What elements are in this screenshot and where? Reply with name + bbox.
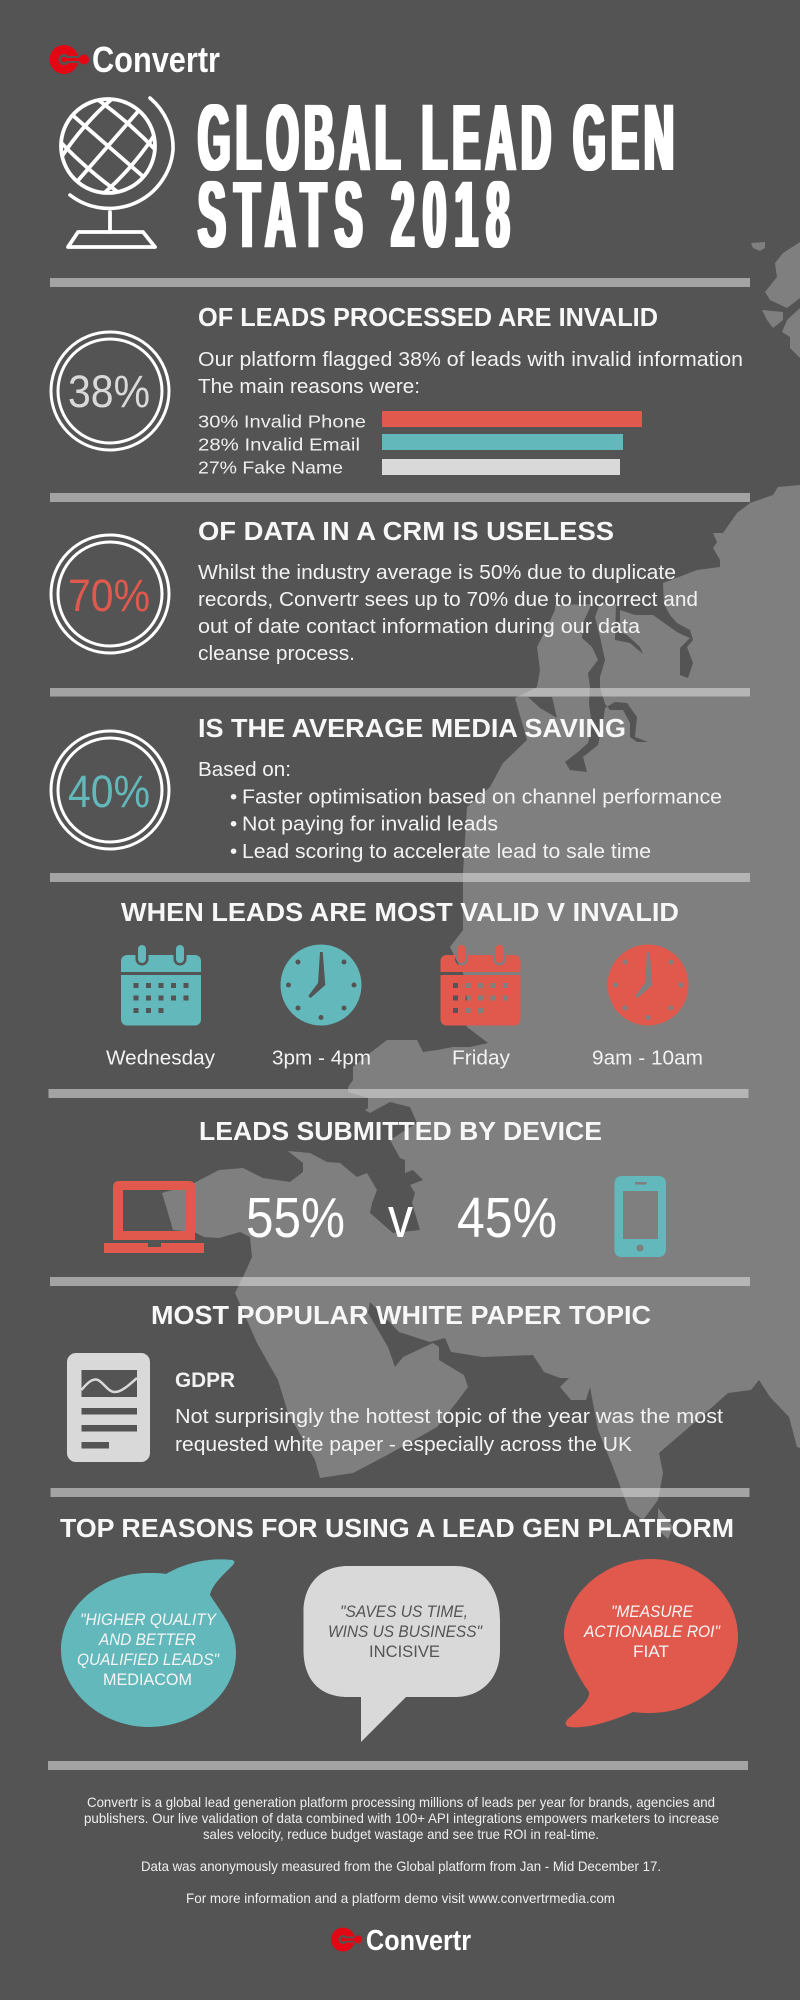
stat ring 38% xyxy=(51,332,169,450)
icon: laptop xyxy=(104,1181,204,1253)
topic name: GDPR xyxy=(175,1369,235,1392)
speech bubble: Mediacom xyxy=(61,1559,236,1727)
panel: top reasons xyxy=(60,1515,738,1742)
heading: WHEN LEADS ARE MOST VALID V INVALID xyxy=(121,899,679,927)
body text xyxy=(198,561,698,665)
topic text: requested white paper - especially across the UK xyxy=(175,1433,632,1456)
speech bubble: Mediacom: MEDIACOM xyxy=(103,1671,192,1689)
icon: teal clock xyxy=(280,944,362,1026)
stat ring 40% xyxy=(51,731,169,849)
stat ring 38%: 38% xyxy=(68,366,150,417)
panel: when leads are valid xyxy=(100,899,703,1070)
speech bubble: Fiat: ACTIONABLE ROI" xyxy=(583,1623,721,1641)
panel: CRM data 70% xyxy=(51,518,698,665)
speech bubble: Fiat: FIAT xyxy=(633,1643,669,1661)
speech bubble: Mediacom: QUALIFIED LEADS" xyxy=(77,1651,220,1669)
map inland seas xyxy=(528,603,693,772)
footer text: Convertr is a global lead generation platform processing millions of leads per year for brands, agencies and xyxy=(87,1794,715,1810)
world map backdrop xyxy=(162,242,800,1539)
footer text: publishers. Our live validation of data combined with 100+ API integrations empowers marketers to increase xyxy=(84,1810,719,1826)
time labels xyxy=(106,1046,703,1070)
time labels: Friday xyxy=(452,1046,511,1070)
icon: document xyxy=(67,1353,150,1462)
footer text: For more information and a platform demo visit www.convertrmedia.com xyxy=(186,1890,615,1906)
device percentages: 45% xyxy=(457,1186,557,1250)
heading: LEADS SUBMITTED BY DEVICE xyxy=(199,1118,602,1146)
speech bubble: Incisive: INCISIVE xyxy=(369,1643,440,1661)
topic text xyxy=(175,1405,723,1456)
bullet list: • xyxy=(230,813,237,836)
heading: IS THE AVERAGE MEDIA SAVING xyxy=(198,715,626,743)
speech bubble: Incisive: WINS US BUSINESS" xyxy=(328,1623,483,1641)
intro text: The main reasons were: xyxy=(198,375,420,398)
time labels: Wednesday xyxy=(106,1046,216,1070)
title: STATS 2018 xyxy=(198,163,510,268)
heading: OF DATA IN A CRM IS USELESS xyxy=(198,518,614,546)
time labels: 9am - 10am xyxy=(592,1046,703,1070)
bar chart: invalid reasons: 28% Invalid Email xyxy=(198,434,360,454)
stat ring 70%: 70% xyxy=(68,570,150,621)
device percentages: 55% xyxy=(246,1186,345,1250)
logo: Convertr top xyxy=(50,39,220,80)
speech bubble: Mediacom: "HIGHER QUALITY xyxy=(80,1611,217,1629)
footer text: Data was anonymously measured from the Global platform from Jan - Mid December 17. xyxy=(141,1858,661,1874)
device percentages: v xyxy=(388,1186,413,1250)
bar chart: invalid reasons: 27% Fake Name xyxy=(198,458,343,478)
body text: Whilst the industry average is 50% due to duplicate xyxy=(198,561,676,584)
bullet list: • xyxy=(230,840,237,863)
stat ring 40%: 40% xyxy=(68,766,150,817)
logo: Convertr bottom xyxy=(331,1925,471,1957)
bullet list: • xyxy=(230,786,237,808)
speech bubble: Incisive xyxy=(304,1566,500,1742)
bullet list xyxy=(198,758,722,863)
body text: out of date contact information during our data xyxy=(198,615,641,638)
bullet list: Based on: xyxy=(198,758,291,781)
intro text: Our platform flagged 38% of leads with invalid information xyxy=(198,348,743,371)
topic text: Not surprisingly the hottest topic of the year was the most xyxy=(175,1405,723,1428)
body text: records, Convertr sees up to 70% due to incorrect and xyxy=(198,588,698,611)
body text: cleanse process. xyxy=(198,642,355,665)
heading: TOP REASONS FOR USING A LEAD GEN PLATFORM xyxy=(60,1515,734,1543)
divider bars xyxy=(48,278,750,1770)
logo: Convertr bottom: Convertr xyxy=(366,1925,471,1957)
title xyxy=(198,86,674,268)
speech bubble: Fiat xyxy=(564,1559,738,1727)
bullet list: Faster optimisation based on channel performance xyxy=(242,786,722,808)
panel: white paper topic xyxy=(67,1302,723,1462)
time labels: 3pm - 4pm xyxy=(272,1046,371,1070)
stat ring 70% xyxy=(51,535,169,653)
speech bubble: Incisive: "SAVES US TIME, xyxy=(340,1603,468,1621)
heading: MOST POPULAR WHITE PAPER TOPIC xyxy=(151,1302,651,1330)
heading: OF LEADS PROCESSED ARE INVALID xyxy=(198,304,658,332)
bar chart: invalid reasons: 30% Invalid Phone xyxy=(198,412,366,432)
icon: phone xyxy=(614,1176,666,1257)
footer text xyxy=(84,1794,719,1906)
panel: invalid leads 38% xyxy=(51,304,743,478)
logo: Convertr top: Convertr xyxy=(92,39,220,80)
device percentages xyxy=(246,1186,557,1250)
bullet list: Lead scoring to accelerate lead to sale time xyxy=(242,840,651,863)
bar chart: invalid reasons xyxy=(198,411,642,478)
title: GLOBAL LEAD GEN xyxy=(198,86,674,191)
footer text: sales velocity, reduce budget wastage and see true ROI in real-time. xyxy=(203,1826,599,1842)
bullet list: Not paying for invalid leads xyxy=(242,813,498,836)
speech bubble: Fiat: "MEASURE xyxy=(611,1603,694,1621)
speech bubble: Mediacom: AND BETTER xyxy=(98,1631,196,1649)
intro text xyxy=(198,348,743,398)
icon: red calendar xyxy=(440,945,520,1026)
panel: media saving 40% xyxy=(51,715,722,863)
icon: globe on stand xyxy=(59,96,175,249)
panel: leads by device xyxy=(104,1118,666,1257)
icon: teal calendar xyxy=(121,945,201,1026)
icon: red clock xyxy=(608,944,688,1026)
